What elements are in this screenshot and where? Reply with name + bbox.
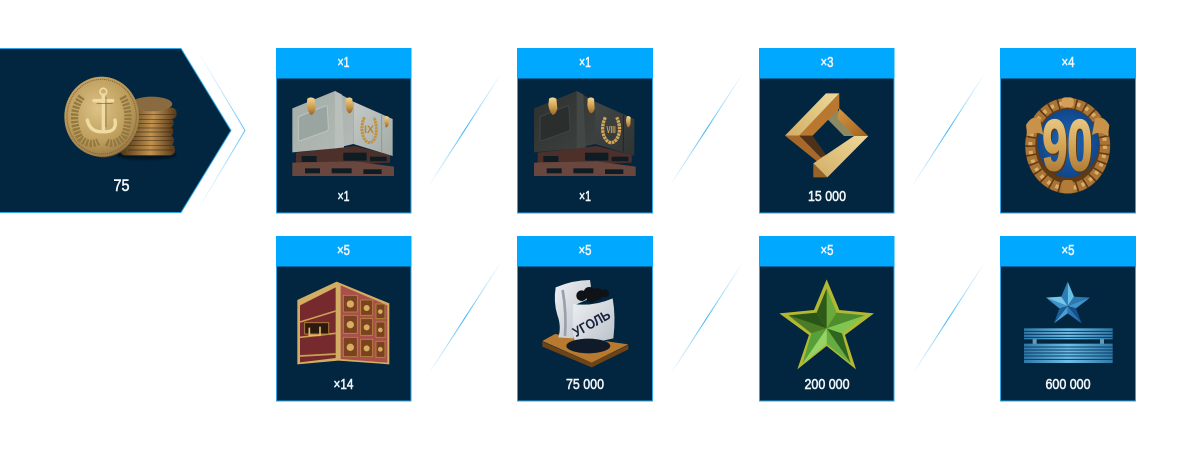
- icon: impossible diamond: [785, 93, 868, 177]
- quantity: ×4: [1062, 55, 1074, 71]
- quantity: ×3: [820, 55, 834, 71]
- reward amount: ×1: [338, 189, 350, 205]
- card: tier 90 badge: [1000, 48, 1136, 213]
- chevron background: [0, 48, 231, 212]
- card body: [518, 48, 652, 213]
- quantity: ×1: [579, 55, 591, 71]
- card: grey crate: [276, 48, 412, 213]
- reward amount: 75 000: [566, 377, 604, 393]
- icon: coal sacks on pallet: УГОЛЬ: [570, 306, 613, 340]
- icon: coin stack: [64, 77, 177, 160]
- card header: [759, 48, 894, 78]
- reward amount: 200 000: [804, 377, 850, 393]
- icon: laurel badge 90: 90: [1043, 107, 1093, 187]
- icon: blue star and bars: [1024, 282, 1113, 363]
- card header: [517, 48, 653, 78]
- card: black crate: [517, 48, 653, 213]
- reward amount: 600 000: [1046, 377, 1090, 393]
- quantity: ×5: [578, 243, 592, 259]
- reward amount: ×14: [334, 377, 354, 393]
- card header: [276, 48, 412, 78]
- quantity: ×5: [1062, 243, 1074, 259]
- card header: [276, 236, 412, 266]
- card: green star: [759, 236, 894, 401]
- card: blue star: [1000, 236, 1136, 401]
- arrow panel: price: [0, 48, 245, 212]
- card: red chest: [276, 236, 412, 401]
- icon: red drawer chest: [297, 282, 389, 364]
- icon: laurel badge 90: 90: [1042, 106, 1092, 186]
- price value: 75: [114, 177, 130, 195]
- card: coal sacks: [517, 236, 653, 401]
- icon: coal sacks on pallet: [542, 280, 628, 367]
- reward amount: 15 000: [808, 189, 846, 205]
- separator slashes: [428, 73, 985, 375]
- card body: [760, 48, 894, 213]
- card header: [1000, 236, 1136, 266]
- card body: [518, 236, 652, 401]
- icon: grey crate on pallet: IX: [364, 124, 375, 136]
- quantity: ×5: [820, 243, 834, 259]
- card: gold diamond: [759, 48, 894, 213]
- reward amount: ×1: [579, 189, 591, 205]
- card body: [760, 236, 894, 401]
- card body: [1000, 236, 1136, 401]
- icon: laurel badge 90: [1025, 97, 1110, 194]
- card body: [1000, 48, 1136, 213]
- quantity: ×5: [337, 243, 350, 259]
- card header: [759, 236, 894, 266]
- outer chevron outline: [197, 50, 245, 211]
- card body: [276, 236, 411, 401]
- icon: grey crate on pallet: [292, 91, 394, 176]
- card body: [276, 48, 411, 213]
- quantity: ×1: [338, 55, 350, 71]
- icon: black crate on pallet: [534, 91, 636, 176]
- card header: [1000, 48, 1136, 78]
- icon: green star: [779, 279, 874, 369]
- icon: black crate on pallet: VIII: [606, 125, 616, 136]
- card header: [517, 236, 653, 266]
